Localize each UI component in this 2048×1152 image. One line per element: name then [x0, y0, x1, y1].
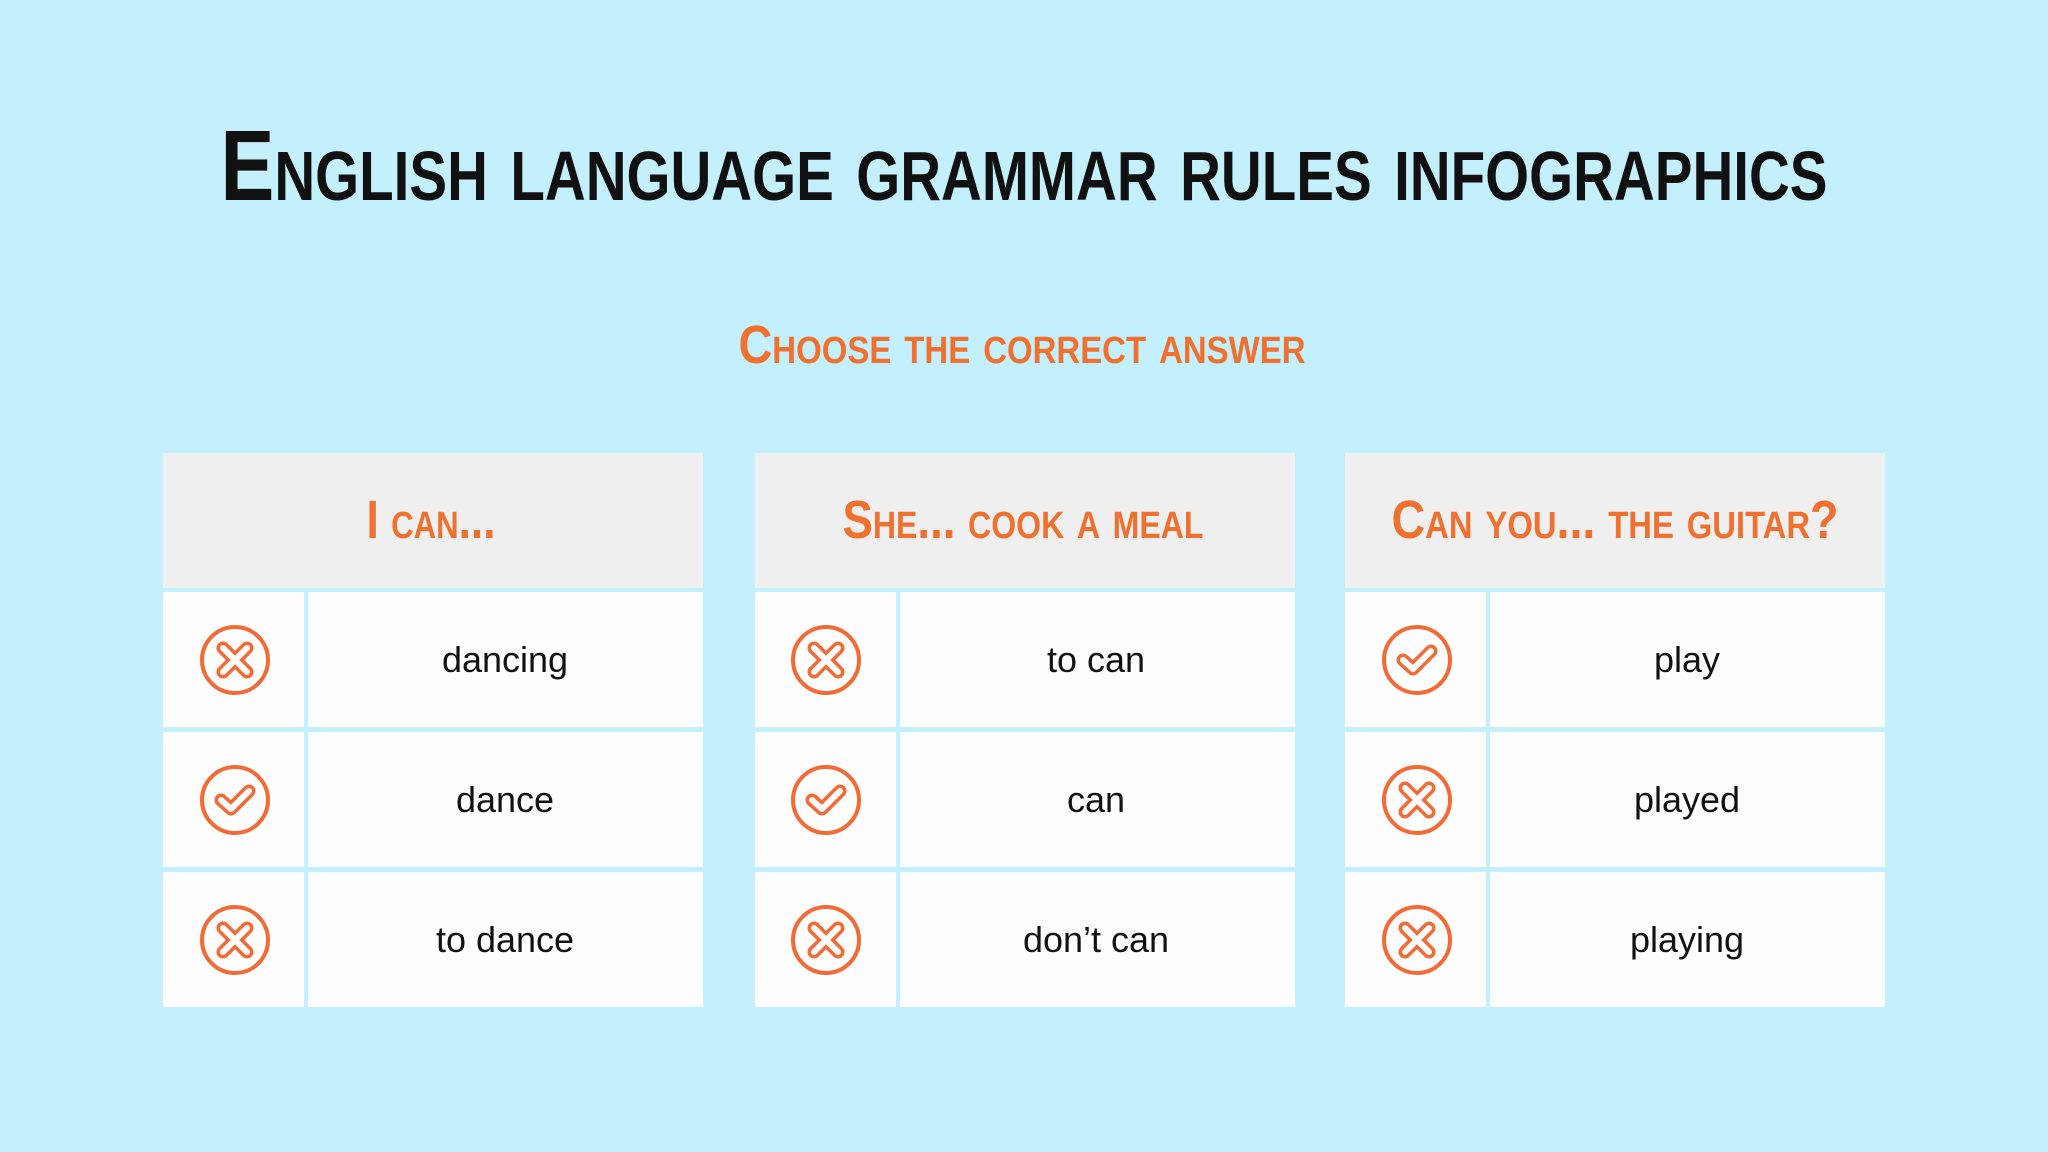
- header: She cook a meal: She... cook a meal: [842, 490, 1204, 550]
- header: I can: [163, 453, 703, 588]
- answer: dancing: [442, 639, 568, 680]
- icon: wrong: [202, 907, 268, 973]
- icon: wrong: [202, 627, 268, 693]
- answer: to dance: [436, 919, 574, 960]
- icon: wrong: [1384, 767, 1450, 833]
- icon: wrong: [1384, 907, 1450, 973]
- header: She cook a meal: [755, 453, 1295, 588]
- panel: I can: [163, 453, 703, 1007]
- icon: correct: [202, 767, 268, 833]
- panel: Can you the guitar: [1345, 453, 1885, 1007]
- header: I can: I can...: [366, 490, 496, 550]
- answer: played: [1634, 779, 1740, 820]
- answer: don’t can: [1023, 919, 1169, 960]
- icon: wrong: [793, 907, 859, 973]
- answer: playing: [1630, 919, 1744, 960]
- header: Can you the guitar: [1345, 453, 1885, 588]
- subtitle: Choose the correct answer: [738, 315, 1306, 375]
- header: Can you the guitar: Can you... the guitar?: [1392, 490, 1838, 550]
- icon: wrong: [793, 627, 859, 693]
- icon: correct: [1384, 627, 1450, 693]
- panel: She cook a meal: [755, 453, 1295, 1007]
- answer: dance: [456, 779, 554, 820]
- answer: to can: [1047, 639, 1145, 680]
- answer: play: [1654, 639, 1720, 680]
- answer: can: [1067, 779, 1125, 820]
- icon: correct: [793, 767, 859, 833]
